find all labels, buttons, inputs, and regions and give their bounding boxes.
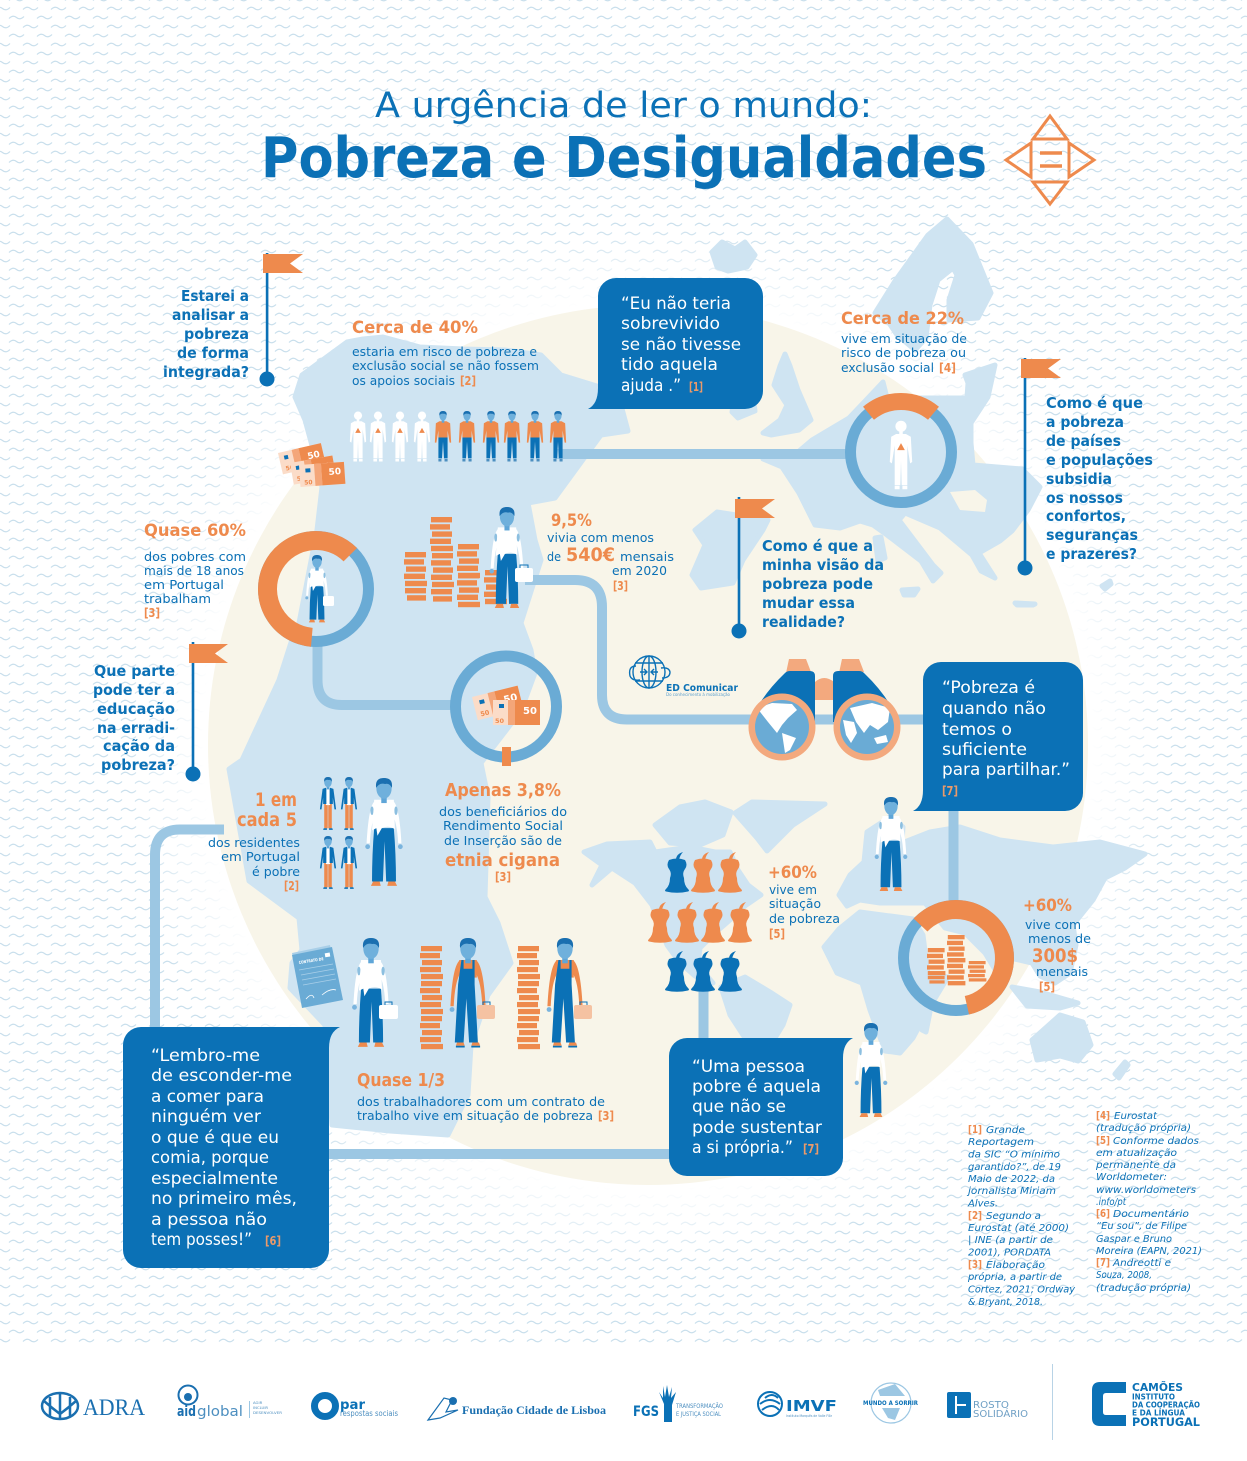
stat body: trabalho vive em situação de pobreza: [357, 1108, 593, 1123]
references column 2: [4]: [1096, 1110, 1110, 1122]
icon: employment contract: CONTRATO DE: [298, 956, 324, 965]
logo: par: par: [340, 1398, 366, 1413]
flag marker: [186, 642, 228, 782]
question text: [762, 537, 884, 631]
back note: 50: [285, 464, 295, 473]
back note: [472, 686, 523, 720]
logo: FGS: [633, 1385, 723, 1422]
references column 1: da SIC “O mínimo: [968, 1148, 1060, 1160]
stat: cerca de 22%: [841, 309, 967, 375]
stat body: de Inserção são de: [444, 833, 562, 848]
icon: four arrows around equals sign: [1006, 116, 1094, 204]
question text: educação: [97, 700, 175, 718]
question text: confortos,: [1046, 507, 1126, 525]
quote text: comia, porque: [151, 1148, 269, 1167]
stat body: em Portugal: [221, 849, 300, 864]
question text: [1046, 394, 1153, 563]
stat heading: Quase 1/3: [357, 1070, 445, 1091]
references column 2: Documentário: [1113, 1208, 1189, 1220]
question text: pobreza?: [101, 756, 175, 774]
coin stack: [517, 946, 540, 1049]
quote text: temos o: [942, 720, 1012, 739]
stat heading: [237, 789, 297, 831]
stat body: vive em situação de: [841, 331, 967, 346]
references column 1: [1]: [968, 1124, 982, 1136]
icon: banknotes: [472, 686, 540, 725]
workers and coin stacks: [352, 938, 592, 1049]
front note: 50: [304, 479, 313, 487]
question text: pobreza: [184, 325, 249, 343]
speech bubble: Uma pessoa pobre: [669, 1038, 853, 1176]
ring chart: 22%: [850, 401, 952, 502]
stat body: de: [547, 549, 561, 564]
quote text: “Eu não teria: [621, 294, 731, 313]
quote text: pobre é aquela: [692, 1077, 821, 1096]
references column 2: Conforme dados: [1113, 1136, 1199, 1147]
references column 2: Moreira (EAPN, 2021): [1096, 1246, 1202, 1257]
references column 2: .info/pt: [1096, 1197, 1127, 1208]
quote text: sobrevivido: [621, 314, 720, 333]
back note: 50: [307, 450, 321, 462]
quote text: para partilhar.”: [942, 760, 1070, 779]
back note: [278, 443, 326, 474]
ring chart: +60% under 300$: [904, 906, 1008, 1010]
stat body: [3]: [495, 869, 511, 884]
logo: Camões: [1092, 1381, 1201, 1429]
question text: os nossos: [1046, 489, 1123, 507]
references column 1: Elaboração: [986, 1260, 1045, 1271]
stat body: [208, 835, 300, 893]
logo: FGS: E JUSTIÇA SOCIAL: [676, 1411, 722, 1418]
stat heading: Cerca de 22%: [841, 309, 964, 329]
logo: ADRA: ADRA: [83, 1395, 145, 1420]
quote text: “Lembro-me: [151, 1046, 260, 1065]
front note: 50: [523, 706, 537, 717]
quote text: [1]: [689, 380, 703, 394]
stat body: etnia cigana: [445, 850, 560, 871]
references column 2: Worldometer:: [1096, 1172, 1167, 1183]
stat heading: +60%: [768, 863, 817, 883]
title line 1: A urgência de ler o mundo:: [375, 86, 872, 126]
coin stack: [420, 946, 443, 1049]
logo: Camões: DA COOPERAÇÃO: [1132, 1400, 1200, 1410]
quote text: o que é que eu: [151, 1128, 279, 1147]
stat body: 300$: [1032, 945, 1078, 967]
stat body: [5]: [769, 926, 785, 941]
stat body: dos pobres com: [144, 549, 246, 564]
stat body: exclusão social se não fossem: [352, 358, 539, 373]
logo: ED Comunicar: [630, 656, 738, 698]
flag marker: [1018, 358, 1061, 576]
logo: IMVF: [758, 1392, 837, 1418]
stat heading: cada 5: [237, 809, 297, 831]
stat body: mensais: [1036, 964, 1088, 979]
front note: [299, 462, 345, 487]
stat body: [841, 331, 967, 375]
question text: analisar a: [172, 306, 249, 324]
stat body: é pobre: [252, 864, 300, 879]
middle note: 50: [318, 462, 332, 474]
stat heading: Apenas 3,8%: [445, 780, 561, 801]
stat body: mais de 18 anos: [144, 563, 244, 578]
references column 2: Gaspar e Bruno: [1096, 1234, 1172, 1245]
references column 2: (tradução própria): [1096, 1122, 1191, 1134]
quote text: especialmente: [151, 1169, 278, 1188]
stat: apenas 3,8%: [439, 780, 567, 884]
quote text: “Uma pessoa: [692, 1057, 805, 1076]
references column 2: [6]: [1096, 1208, 1110, 1220]
references column 2: Souza, 2008,: [1096, 1270, 1152, 1281]
stat body: [3]: [144, 605, 160, 620]
map of Europe: [692, 219, 1111, 605]
references column 2: Eurostat: [1114, 1111, 1158, 1122]
flag question: integrated analysis: [163, 253, 303, 386]
logo: ED Comunicar: ED Comunicar: [666, 683, 738, 694]
stat body: dos trabalhadores com um contrato de: [357, 1094, 605, 1109]
quote text: “Pobreza é: [942, 678, 1035, 697]
worker in torn shirt: [352, 938, 398, 1047]
figure: standing man: [875, 797, 907, 891]
quote text: a si própria.”: [692, 1138, 793, 1157]
logo: IMVF: IMVF: [786, 1397, 837, 1415]
ring chart: 3.8% with banknotes: [456, 656, 556, 766]
stat heading: 9,5%: [551, 511, 592, 531]
question text: mudar essa: [762, 594, 855, 612]
stat heading: Cerca de 40%: [352, 318, 478, 338]
ring chart: 60% workers: [264, 536, 368, 642]
quote text: [942, 678, 1070, 798]
speech bubble: Eu não teria sobrevivido: [588, 278, 763, 409]
stat body: [3]: [613, 578, 628, 593]
references column 1: [966, 1124, 1076, 1308]
stat body: situação: [769, 896, 821, 911]
flag question: subsidised comforts: [1018, 358, 1153, 576]
logo: aidglobal: aid: [177, 1404, 196, 1420]
references column 1: jornalista Miriam: [966, 1186, 1056, 1197]
question text: e prazeres?: [1046, 545, 1137, 563]
quote text: no primeiro mês,: [151, 1189, 297, 1208]
references column 2: [7]: [1096, 1257, 1110, 1269]
quote text: [7]: [942, 784, 958, 798]
quote text: ajuda .”: [621, 376, 681, 395]
references column 1: Reportagem: [968, 1137, 1034, 1148]
middle note: 50: [296, 475, 306, 483]
world map: [584, 802, 1145, 1078]
quote text: [621, 294, 741, 395]
quote text: se não tivesse: [621, 335, 741, 354]
stat body: [357, 1094, 614, 1123]
stat body: mensais: [620, 549, 674, 564]
figure: man beside bubble: [855, 1023, 887, 1117]
stat body: os apoios sociais: [352, 373, 455, 388]
flag marker: [260, 253, 303, 386]
title: [261, 86, 987, 191]
icon: person at risk: [890, 421, 912, 489]
references column 1: Grande: [986, 1125, 1025, 1136]
stat: +60% under 300$: [1023, 896, 1091, 994]
quote text: suficiente: [942, 740, 1027, 759]
references column 1: Cortez, 2021; Ordway: [968, 1284, 1076, 1296]
front note: 50: [495, 717, 505, 725]
cream globe circle: [208, 305, 1088, 1185]
stat body: dos beneficiários do: [439, 804, 567, 819]
stat heading: 1 em: [255, 789, 297, 811]
quote text: a pessoa não: [151, 1210, 267, 1229]
logo: par: [314, 1396, 398, 1418]
icon: employment contract: [292, 945, 343, 1008]
quote text: tido aquela: [621, 355, 718, 374]
references column 1: & Bryant, 2018.: [968, 1297, 1043, 1308]
question text: minha visão da: [762, 556, 884, 574]
figures: one in five: [320, 777, 403, 889]
logo: ED Comunicar: Do conhecimento à mobilização: [666, 691, 730, 698]
stat body: dos residentes: [208, 835, 300, 850]
back note: 50: [480, 708, 491, 718]
question text: [93, 662, 175, 774]
front note: [493, 700, 540, 725]
connector lines: [155, 454, 954, 1154]
worker in overalls: [547, 938, 592, 1047]
logo: FGS: TRANSFORMAÇÃO: [675, 1403, 723, 1410]
quote text: pode sustentar: [692, 1118, 822, 1137]
stat body: exclusão social: [841, 360, 934, 375]
stat body: vive com: [1025, 917, 1081, 932]
logo: Fundação Cidade de Lisboa: Fundação Cidade de Lisboa: [462, 1403, 606, 1417]
references column 2: em atualização: [1096, 1148, 1177, 1159]
logo: Camões: E DA LÍNGUA: [1132, 1408, 1185, 1418]
stat: +60% poverty: [768, 863, 840, 941]
footer logos band: [42, 1364, 1201, 1440]
quote text: tem posses!”: [151, 1230, 252, 1249]
stat body: [2]: [284, 878, 299, 893]
references column 2: (tradução própria): [1096, 1282, 1191, 1294]
references column 1: | INE (a partir de: [968, 1235, 1053, 1246]
logo: Camões: CAMÕES: [1132, 1381, 1183, 1394]
quote text: que não se: [692, 1097, 786, 1116]
icon: banknotes pile: [278, 443, 345, 487]
front note: 50: [328, 467, 341, 478]
question text: realidade?: [762, 613, 845, 631]
quote text: [7]: [803, 1142, 819, 1156]
icon: worker with briefcase: [305, 555, 334, 622]
question text: Como é que: [1046, 394, 1143, 412]
stat: 9,5%: [547, 511, 674, 593]
references column 1: [2]: [968, 1210, 982, 1222]
logo: Mundo a Sorrir: [863, 1383, 918, 1423]
stat heading: Quase 60%: [144, 521, 246, 541]
logo: IMVF: Instituto Marquês de Valle Flôr: [786, 1414, 832, 1418]
worker in overalls: [450, 938, 495, 1047]
question text: pobreza pode: [762, 575, 873, 593]
title line 2: Pobreza e Desigualdades: [261, 126, 987, 191]
flag question: role of education: [93, 642, 228, 782]
question text: na erradi-: [97, 719, 175, 737]
stat body: estaria em risco de pobreza e: [352, 344, 537, 359]
logo: aidglobal: global: [197, 1404, 243, 1420]
quote text: quando não: [942, 699, 1046, 718]
stat heading: +60%: [1023, 896, 1072, 916]
white halo around the globe: [113, 210, 1183, 1280]
stat body: [144, 549, 246, 620]
stat: quase 60%: [144, 521, 246, 620]
logo: Rosto Solidário: [947, 1392, 1028, 1420]
stat body: em Portugal: [144, 577, 224, 592]
question text: seguranças: [1046, 526, 1138, 544]
references column 1: Alves.: [967, 1198, 998, 1210]
references column 1: própria, a partir de: [967, 1271, 1062, 1283]
references column 2: permanente da: [1095, 1160, 1176, 1171]
quote text: ninguém ver: [151, 1107, 261, 1126]
question text: de forma: [177, 344, 249, 362]
logo: aidglobal: DESENVOLVER: [253, 1410, 282, 1415]
speech bubble: Lembro-me de esconder-me: [123, 1027, 340, 1268]
logo: Camões: INSTITUTO: [1132, 1392, 1175, 1402]
stat body: em 2020: [612, 563, 667, 578]
quote text: [692, 1057, 822, 1157]
question text: [163, 287, 249, 381]
logo: Rosto Solidário: ROSTO: [973, 1400, 1009, 1411]
references column 1: garantido?”, de 19: [968, 1162, 1061, 1173]
quote text: a comer para: [151, 1087, 264, 1106]
stat body: [3]: [598, 1108, 614, 1123]
references column 1: Eurostat (até 2000): [968, 1222, 1069, 1234]
stat body: [2]: [460, 373, 476, 388]
stat body: trabalham: [144, 591, 211, 606]
logo: FGS: FGS: [633, 1404, 659, 1420]
logo: ADRA: [42, 1393, 145, 1420]
stat body: [769, 882, 840, 941]
apple core pictogram: [648, 852, 752, 992]
coin stacks chart: [404, 517, 507, 607]
stat body: [352, 344, 539, 388]
question text: de países: [1046, 432, 1121, 450]
quote text: de esconder-me: [151, 1066, 292, 1085]
map of Portugal: [229, 337, 628, 1135]
references column 1: 2001), PORDATA: [968, 1248, 1051, 1258]
footer divider: [1052, 1364, 1053, 1440]
references column 1: Maio de 2022, da: [968, 1174, 1055, 1185]
stat body: [439, 804, 567, 884]
logo: Camões: PORTUGAL: [1132, 1415, 1201, 1429]
logo: aidglobal: AGIR: [253, 1400, 263, 1405]
logo: Mundo a Sorrir: MUNDO A SORRIR: [863, 1400, 918, 1407]
references column 2: www.worldometers: [1096, 1185, 1196, 1196]
stat body: [1025, 917, 1091, 994]
stat body: risco de pobreza ou: [841, 345, 966, 360]
references column 2: “Eu sou”, de Filipe: [1096, 1221, 1187, 1232]
stat body: [5]: [1039, 979, 1055, 994]
question text: Como é que a: [762, 537, 873, 555]
question text: subsidia: [1046, 470, 1112, 488]
references column 2: Andreotti e: [1112, 1258, 1171, 1269]
stat body: [4]: [939, 360, 956, 375]
logo: aidglobal: INCLUIR: [253, 1405, 268, 1410]
row of ten people: [350, 411, 566, 461]
logo: Fundação Cidade de Lisboa: [428, 1397, 606, 1420]
stat: quase 1/3: [357, 1070, 614, 1123]
stat body: de pobreza: [769, 911, 840, 926]
middle note: [290, 456, 336, 485]
question text: cação da: [103, 737, 175, 755]
question text: Que parte: [94, 662, 175, 680]
quote text: [6]: [265, 1234, 281, 1248]
flag marker: [732, 497, 775, 638]
cream gap in the Balkans: [950, 490, 987, 512]
question text: pode ter a: [93, 681, 175, 699]
stat body: 540€: [566, 544, 615, 566]
question text: a pobreza: [1046, 413, 1124, 431]
references column 2: [5]: [1096, 1135, 1110, 1147]
logo: Rosto Solidário: SOLIDÁRIO: [973, 1407, 1028, 1420]
stat: 1 em cada 5: [208, 789, 300, 893]
question text: integrada?: [163, 363, 249, 381]
back note: 50: [503, 692, 519, 706]
references column 2: [1095, 1110, 1202, 1294]
stat body: [547, 530, 674, 593]
logo: par: respostas sociais: [340, 1409, 398, 1418]
stat body: vivia com menos: [547, 530, 654, 545]
flag question: changing my vision: [732, 497, 884, 638]
quote text: [151, 1046, 297, 1249]
coin stacks: [927, 935, 986, 985]
stat: cerca de 40%: [352, 318, 539, 388]
figure: man with briefcase: [489, 507, 533, 608]
stat body: menos de: [1028, 931, 1091, 946]
question text: e populações: [1046, 451, 1153, 469]
icon: binoculars: [748, 659, 900, 760]
logo: aidglobal: [177, 1386, 282, 1420]
speech bubble: Pobreza é quando não temos: [913, 662, 1083, 811]
stat body: vive em: [769, 882, 817, 897]
question text: Estarei a: [181, 287, 249, 305]
stat body: Rendimento Social: [443, 818, 563, 833]
references column 1: [3]: [968, 1259, 982, 1271]
references column 1: Segundo a: [986, 1211, 1041, 1222]
